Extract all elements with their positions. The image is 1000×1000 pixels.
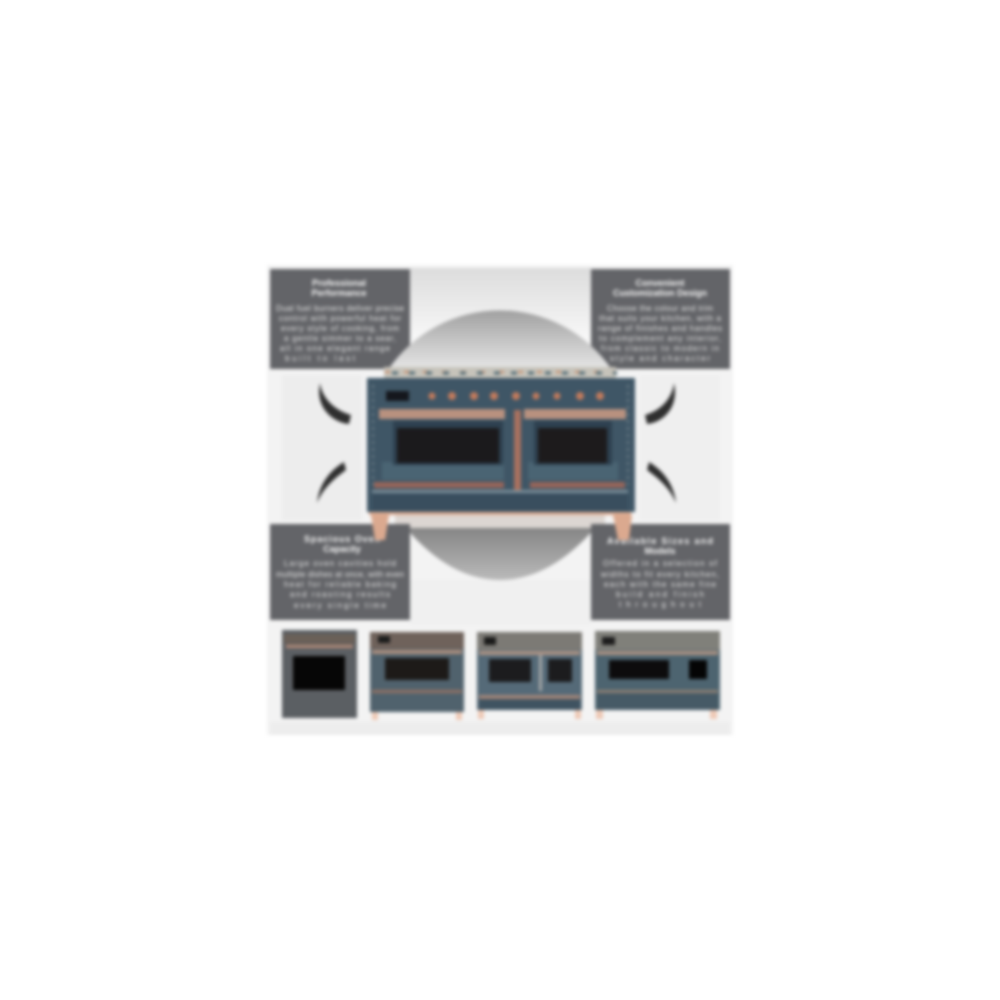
panel: top left: control with powerful heat for [279, 314, 401, 323]
panel: bottom left: Spacious Oven [304, 534, 380, 544]
left oven door [382, 462, 504, 480]
panel: top left: every style of cooking, from [281, 324, 399, 333]
panel: top left [270, 269, 410, 369]
control display [386, 391, 409, 401]
panel: top left: built to last [285, 354, 356, 363]
panel: bottom left: Capacity [323, 544, 361, 554]
panel: top right: from classic to modern in [601, 344, 719, 353]
panel: bottom right: widths to fit every kitchen, [600, 570, 719, 579]
backdrop upper circle [388, 310, 612, 370]
background panel [267, 265, 733, 735]
range body [367, 378, 635, 512]
panel: top right: range of finishes and handles [598, 324, 722, 333]
arrow: top left [319, 383, 351, 424]
left oven window [393, 421, 503, 465]
panel: bottom right: each with the same fine [604, 580, 717, 589]
panel: bottom right [591, 524, 730, 620]
legs [369, 512, 632, 540]
arrow: bottom right [647, 462, 676, 503]
right oven door [528, 462, 618, 480]
panel: top right: style and character [610, 354, 710, 363]
main range cooker [367, 367, 635, 540]
control knobs [428, 392, 604, 400]
panel: bottom left: and roasting results [290, 590, 390, 599]
small range: 24 inch [282, 630, 357, 718]
lower handles [374, 482, 625, 488]
panel: top right: Choose the colour and trim [607, 304, 713, 313]
panel: bottom left [270, 524, 410, 620]
panel: bottom right: build and finish [616, 590, 704, 599]
vertical handle [514, 410, 521, 490]
backdrop lower circle [395, 514, 605, 580]
panel: bottom right: Offered in a selection of [603, 559, 718, 568]
small range: 60 inch [595, 631, 720, 719]
panel: bottom right: Available Sizes and [607, 536, 713, 546]
panel: bottom left: Large oven cavities hold [284, 559, 396, 568]
small range: 48 inch [477, 632, 582, 719]
arrow: top right [645, 383, 675, 424]
panel: top left: Professional [312, 278, 366, 288]
panel: top right: Customization Design [613, 288, 707, 298]
panel: bottom right: Models [644, 546, 676, 556]
panel: top right [591, 269, 730, 369]
panel: bottom right: throughout [619, 600, 702, 609]
panel: bottom left: every single time [294, 601, 387, 610]
small range: 36 inch [370, 632, 464, 720]
panel: top left: Dual fuel burners deliver precise [276, 304, 405, 313]
upper handles [379, 409, 626, 419]
panel: top left: Performance [311, 288, 367, 298]
panel: bottom left: multiple dishes at once, with even [276, 570, 404, 579]
lower trim [372, 490, 628, 493]
panel: top right: that suits your kitchen, with a [599, 314, 722, 323]
arrow: bottom left [317, 462, 346, 503]
drawer [372, 494, 628, 510]
side trim [373, 385, 628, 485]
panel: top left: all in one elegant range [280, 344, 391, 353]
panel: top left: a gentle simmer to a sear, [284, 334, 396, 343]
panel: bottom left: heat for reliable baking [284, 580, 396, 589]
right oven window [534, 421, 612, 465]
panel: top right: Convenient [635, 278, 685, 288]
panel: top right: to complement any interior, [599, 334, 721, 343]
cooktop [384, 367, 617, 378]
